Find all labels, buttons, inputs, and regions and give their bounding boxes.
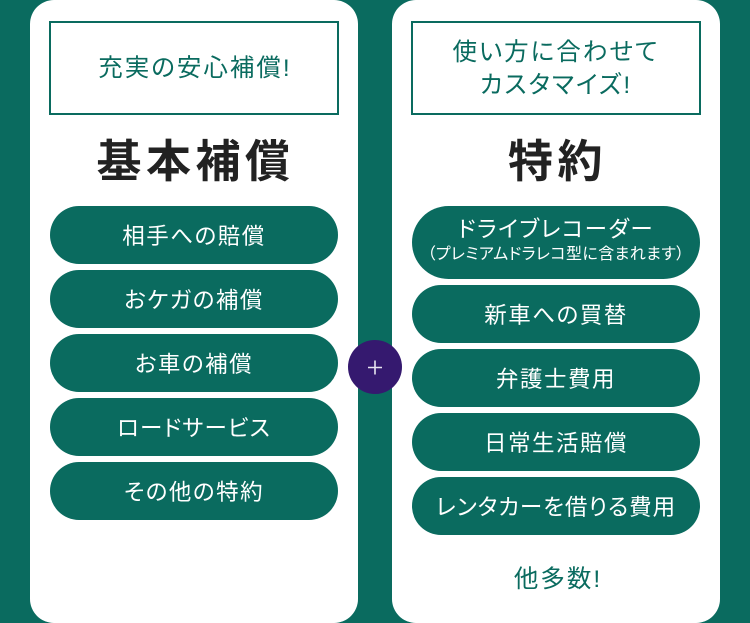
item: liability <box>50 206 338 264</box>
item: road service: ロードサービス <box>117 416 271 441</box>
item: injury: おケガの補償 <box>124 288 264 313</box>
callout: customise: カスタマイズ! <box>480 72 632 99</box>
callout: customise: 使い方に合わせて <box>452 39 660 66</box>
item: road service <box>50 398 338 456</box>
item: liability: 相手への賠償 <box>122 224 266 249</box>
item: rental car: レンタカーを借りる費用 <box>436 495 676 520</box>
item: lawyer fees: 弁護士費用 <box>496 367 616 392</box>
item: vehicle: お車の補償 <box>135 352 253 377</box>
item: other riders: その他の特約 <box>124 480 264 505</box>
item: vehicle <box>50 334 338 392</box>
item: injury <box>50 270 338 328</box>
item: dashcam <box>412 206 700 279</box>
callout: customise <box>411 21 701 115</box>
item: daily life liability <box>412 413 700 471</box>
text: many more: 他多数! <box>514 566 602 593</box>
item: rental car <box>412 477 700 535</box>
item: new car replacement <box>412 285 700 343</box>
icon: plus badge <box>348 340 402 394</box>
callout: full coverage: 充実の安心補償! <box>98 55 292 82</box>
item: dashcam: （プレミアムドラレコ型に含まれます） <box>427 246 685 263</box>
heading: basic coverage: 基本補償 <box>96 136 294 186</box>
item: lawyer fees <box>412 349 700 407</box>
panel: basic coverage <box>30 0 358 623</box>
callout: full coverage <box>49 21 339 115</box>
item: daily life liability: 日常生活賠償 <box>484 431 628 456</box>
heading: riders: 特約 <box>508 136 607 186</box>
item: new car replacement: 新車への買替 <box>484 303 628 328</box>
panel: riders <box>392 0 720 623</box>
item: dashcam: ドライブレコーダー <box>458 217 654 242</box>
item: other riders <box>50 462 338 520</box>
